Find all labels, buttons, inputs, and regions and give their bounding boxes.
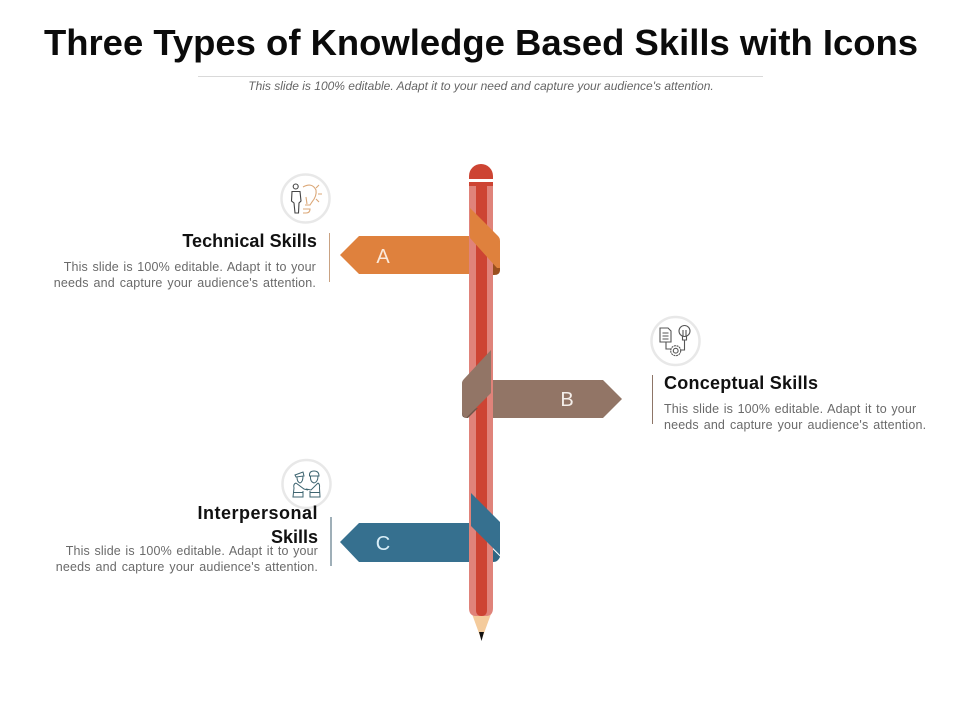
body: This slide is 100% editable. Adapt it to your [64,260,316,274]
body: needs and capture your audience's attention. [664,418,926,432]
heading: Skills [271,527,318,547]
arrow B [493,380,622,418]
arrow B: B [560,389,574,411]
subtitle: This slide is 100% editable. Adapt it to your need and capture your audience's attention. [248,79,714,93]
body [56,544,318,574]
divider lines [330,233,652,566]
text: conceptual skills [664,373,926,432]
title: Three Types of Knowledge Based Skills with Icons [44,22,918,63]
text: technical skills [54,231,317,290]
arrow A: A [376,246,390,268]
heading: Conceptual Skills [664,373,818,393]
icon: handshake [282,460,330,508]
ribbon band C [471,493,500,562]
icon: person with light bulb [282,174,330,222]
heading [197,503,318,547]
ribbon band B [462,350,491,418]
ribbon band A [470,208,500,275]
arrow A [340,236,469,274]
icon: document, bulb and gear [652,317,700,365]
arrow C: C [376,533,390,555]
pencil [469,164,493,641]
body: This slide is 100% editable. Adapt it to your [66,544,318,558]
heading: Interpersonal [197,503,318,523]
body [54,260,316,290]
text: interpersonal skills [56,503,318,574]
body: needs and capture your audience's attention. [56,560,318,574]
arrow C [340,523,470,562]
body [664,402,926,432]
body: needs and capture your audience's attention. [54,276,316,290]
body: This slide is 100% editable. Adapt it to your [664,402,916,416]
heading: Technical Skills [182,231,317,251]
